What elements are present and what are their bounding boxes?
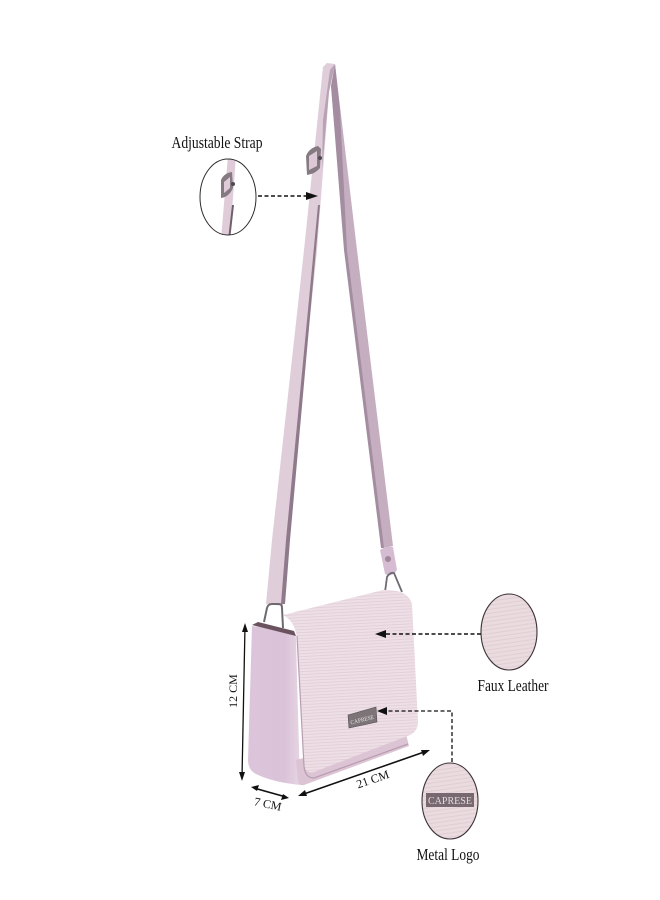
label: Metal Logo [416,845,480,864]
circle detail [422,763,478,839]
circle detail [200,155,256,240]
arrow [377,707,452,762]
strap buckle [306,146,322,175]
strap ring [385,573,402,592]
strap ring left [264,604,283,628]
circle detail: CAPRESE [428,795,472,807]
label: Faux Leather [478,676,549,695]
bag [248,590,418,785]
bag lower base [296,730,409,785]
metal logo plate: CAPRESE [350,715,375,726]
circle detail [481,594,537,670]
bag side panel [248,626,300,785]
bag top edge [252,622,296,636]
bag flap [283,590,418,772]
front strap [264,63,335,628]
dimension: depth 7 CM: 7 CM [253,794,283,814]
strap snap [385,556,391,562]
metal logo plate [348,707,377,728]
dimension: width 21 CM: 21 CM [354,767,391,791]
callout: metal logo [377,707,480,864]
dimension: depth 7 CM [251,785,289,814]
strap tab [380,547,397,575]
label: Adjustable Strap [172,133,262,152]
arrow [375,630,481,638]
arrow [258,192,318,200]
callout: faux leather [375,594,549,695]
callout: adjustable strap [172,133,318,240]
bag flap edge [297,636,408,778]
dimension: height 12 CM [226,623,248,781]
back strap [331,64,402,592]
dimension: height 12 CM: 12 CM [226,674,240,708]
dimension: width 21 CM [298,750,430,796]
